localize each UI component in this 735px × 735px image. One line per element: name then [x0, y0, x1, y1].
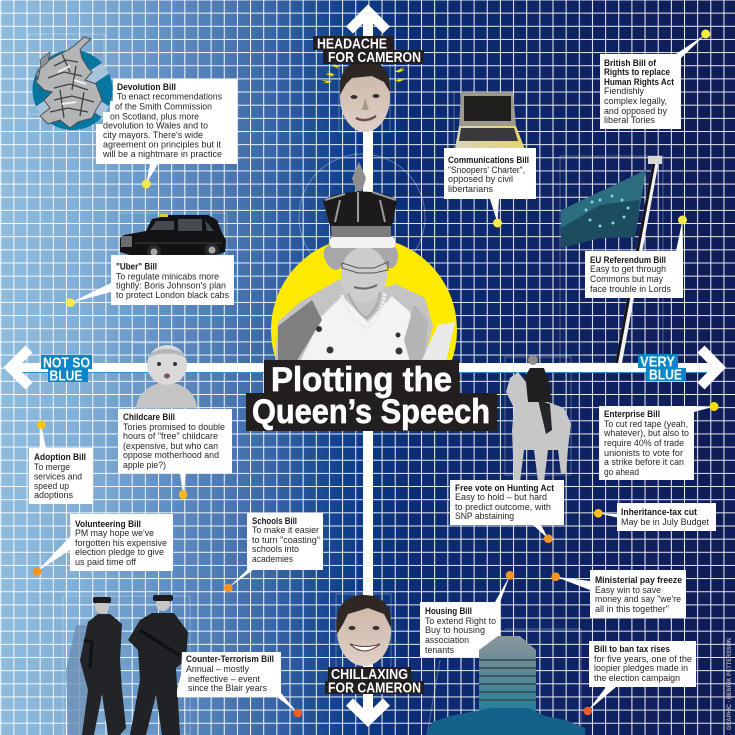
- text: [621, 507, 709, 528]
- dot: [142, 180, 151, 188]
- text: to predict outcome, with: [455, 502, 551, 513]
- text: [116, 262, 229, 301]
- hair: [324, 244, 398, 270]
- text: and opposed by: [604, 106, 667, 117]
- label: Not so blue: BLUE: [50, 368, 83, 384]
- text: apple pie?): [123, 460, 166, 471]
- text: Schools Bill: [252, 516, 297, 527]
- text: Human Rights Act: [604, 77, 675, 88]
- dot: [37, 420, 46, 429]
- text: unionists to vote for: [604, 448, 684, 459]
- text: [34, 452, 86, 501]
- text: opposed by civil: [448, 174, 513, 185]
- text: [595, 575, 682, 615]
- text: forgotten his expensive: [75, 538, 167, 549]
- icon: headache bolts: [321, 58, 406, 83]
- text: Commons but may: [590, 274, 663, 285]
- dot: [506, 571, 514, 580]
- callout: Adoption Bill: [29, 420, 93, 504]
- callout: Housing Bill: [420, 571, 514, 657]
- face: [341, 247, 387, 303]
- text: [604, 58, 675, 126]
- text: Easy to get through: [590, 264, 666, 275]
- text: since the Blair years: [188, 683, 267, 694]
- text: "Snoopers' Charter",: [448, 165, 525, 176]
- text: May be in July Budget: [621, 517, 709, 528]
- image: horse and rider: [505, 355, 571, 482]
- text: Rights to replace: [604, 67, 670, 78]
- text: [75, 519, 167, 568]
- text: To extend Right to: [425, 616, 496, 627]
- image: baby: [132, 343, 199, 409]
- text: will be a nightmare in practice: [102, 149, 222, 160]
- text: To enact recommendations: [117, 92, 222, 102]
- text: Housing Bill: [425, 606, 472, 617]
- title: Queen’s Speech: [252, 393, 490, 431]
- text: money and say "we're: [595, 594, 681, 605]
- text: Annual – mostly: [186, 664, 249, 675]
- text: Tories promised to double: [123, 422, 225, 433]
- text: Inheritance-tax cut: [621, 507, 698, 518]
- text: Enterprise Bill: [604, 409, 660, 420]
- label: Very blue: VERY: [640, 354, 675, 370]
- text: to protect London black cabs: [116, 290, 229, 301]
- callout: Enterprise Bill: [599, 402, 718, 480]
- dot: [179, 490, 187, 499]
- text: agreement on principles but it: [103, 140, 221, 150]
- text: Ministerial pay freeze: [595, 575, 682, 586]
- callout: Schools Bill: [224, 513, 323, 592]
- text: SNP abstaining: [455, 511, 514, 522]
- text: Adoption Bill: [34, 452, 86, 463]
- text: us paid time off: [75, 557, 136, 568]
- crown: [323, 192, 397, 238]
- callout: Inheritance-tax cut: [594, 503, 716, 531]
- text: Communications Bill: [448, 155, 529, 166]
- image: Queen on yellow circle: [271, 154, 457, 360]
- text: for five years, one of the: [594, 654, 692, 665]
- callout: Volunteering Bill: [33, 514, 173, 576]
- text: libertarians: [448, 184, 493, 195]
- text: EU Referendum Bill: [590, 255, 666, 266]
- text: British Bill of: [604, 58, 657, 69]
- text: on Scotland, plus more: [110, 112, 199, 122]
- callout: Communications Bill: [444, 148, 536, 228]
- image: London black cab: [119, 213, 227, 259]
- text: schools into: [252, 544, 299, 555]
- text: of the Smith Commission: [115, 102, 212, 112]
- label: Not so blue: NOT SO: [43, 356, 90, 372]
- text: (expensive, but who can: [123, 441, 218, 452]
- text: a strike before it can: [604, 457, 684, 468]
- image: laptop: [454, 92, 526, 154]
- text: To regulate minicabs more: [116, 272, 219, 282]
- text: Volunteering Bill: [75, 519, 141, 530]
- title: [246, 360, 497, 431]
- text: Free vote on Hunting Act: [455, 483, 555, 494]
- text: [594, 644, 692, 684]
- text: hours of "free" childcare: [123, 431, 218, 442]
- text: [123, 412, 225, 471]
- text: liberal Tories: [604, 115, 655, 126]
- text: Easy win to save: [595, 585, 661, 596]
- dot: [594, 509, 603, 518]
- image: EU flag on pole: [560, 156, 663, 363]
- callout: Counter-Terrorism Bill: [177, 652, 302, 717]
- text: [603, 409, 689, 478]
- label: Chillaxing for Cameron: FOR CAMERON: [328, 680, 421, 696]
- callout: British Bill of Rights: [600, 30, 710, 129]
- text: Buy to housing: [425, 625, 485, 636]
- text: Fiendishly: [604, 86, 644, 97]
- text: Bill to ban tax rises: [594, 644, 670, 655]
- callout: Uber Bill: [66, 255, 234, 307]
- image: Cameron chillaxing: [336, 594, 391, 669]
- text: adoptions: [34, 490, 73, 501]
- label: Chillaxing for Cameron: [325, 667, 424, 696]
- callout: Free vote on Hunting Act: [450, 480, 564, 543]
- dot: [583, 707, 592, 715]
- text: PM may hope we've: [75, 528, 154, 539]
- image: Scotland map on saltire: [28, 34, 115, 130]
- callout: EU Referendum Bill: [585, 216, 687, 298]
- text: [252, 516, 320, 565]
- text: devolution to Wales and to: [103, 120, 208, 132]
- label: Chillaxing for Cameron: CHILLAXING: [331, 667, 408, 683]
- text: election pledge to give: [75, 547, 164, 558]
- text: to turn "coasting": [252, 535, 320, 546]
- dot: [701, 30, 710, 38]
- pearls: [340, 292, 386, 310]
- dot: [224, 584, 233, 592]
- text: To merge: [34, 462, 70, 473]
- text: To make it easier: [252, 525, 320, 536]
- text: ineffective – event: [188, 674, 260, 685]
- text: all in this together": [595, 604, 669, 615]
- text: oppose motherhood and: [123, 450, 219, 461]
- image: tower block: [426, 629, 585, 735]
- text: [448, 155, 529, 195]
- dot: [678, 216, 687, 224]
- text: Counter-Terrorism Bill: [186, 654, 274, 665]
- text: loopier pledges made in: [594, 663, 688, 674]
- title: Plotting the: [271, 361, 452, 399]
- text: complex legally,: [604, 96, 667, 107]
- dot: [66, 298, 75, 307]
- label: Headache for Cameron: [313, 36, 424, 66]
- robe: [275, 280, 433, 362]
- dot: [33, 567, 41, 576]
- label: Very blue: BLUE: [649, 368, 682, 384]
- text: [102, 82, 222, 160]
- text: the election campaign: [594, 673, 680, 684]
- text: [186, 654, 274, 694]
- dot: [544, 534, 553, 543]
- text: face trouble in Lords: [590, 284, 671, 295]
- text: tightly: Boris Johnson's plan: [116, 280, 226, 292]
- text: academies: [252, 554, 293, 565]
- text: [455, 483, 555, 522]
- dot: [551, 572, 560, 581]
- text: [425, 606, 496, 656]
- text: tenants: [425, 645, 454, 656]
- image: armed police officers: [63, 595, 190, 735]
- text: go ahead: [604, 467, 639, 478]
- text: speed up: [34, 481, 69, 492]
- text: Childcare Bill: [123, 412, 175, 423]
- book: [421, 322, 455, 362]
- text: To cut red tape (yeah,: [604, 419, 688, 430]
- callout: Bill to ban tax rises: [583, 641, 696, 715]
- text: Easy to hold – but hard: [455, 492, 547, 503]
- label: Very blue: [638, 354, 686, 384]
- image: Cameron headache: [321, 52, 406, 132]
- text: require 40% of trade: [604, 438, 684, 449]
- callout: Ministerial pay freeze: [551, 570, 686, 618]
- label: Headache for Cameron: HEADACHE: [317, 36, 387, 52]
- text: whatever), but also to: [603, 428, 689, 439]
- label: Not so blue: [41, 355, 92, 384]
- dot: [493, 218, 502, 228]
- dot: [293, 709, 302, 717]
- callout: Childcare Bill: [118, 409, 232, 499]
- text: "Uber" Bill: [116, 262, 157, 272]
- text: [590, 255, 671, 295]
- text: services and: [34, 472, 82, 482]
- text: Devolution Bill: [117, 82, 176, 93]
- callout: Devolution Bill: [96, 79, 237, 188]
- label: Headache for Cameron: FOR CAMERON: [328, 50, 421, 66]
- dot: [710, 402, 718, 411]
- credit: GRAPHIC - HENRIK PETTERSSON: [726, 638, 733, 730]
- text: association: [425, 635, 469, 646]
- text: city mayors. There's wide: [103, 130, 203, 141]
